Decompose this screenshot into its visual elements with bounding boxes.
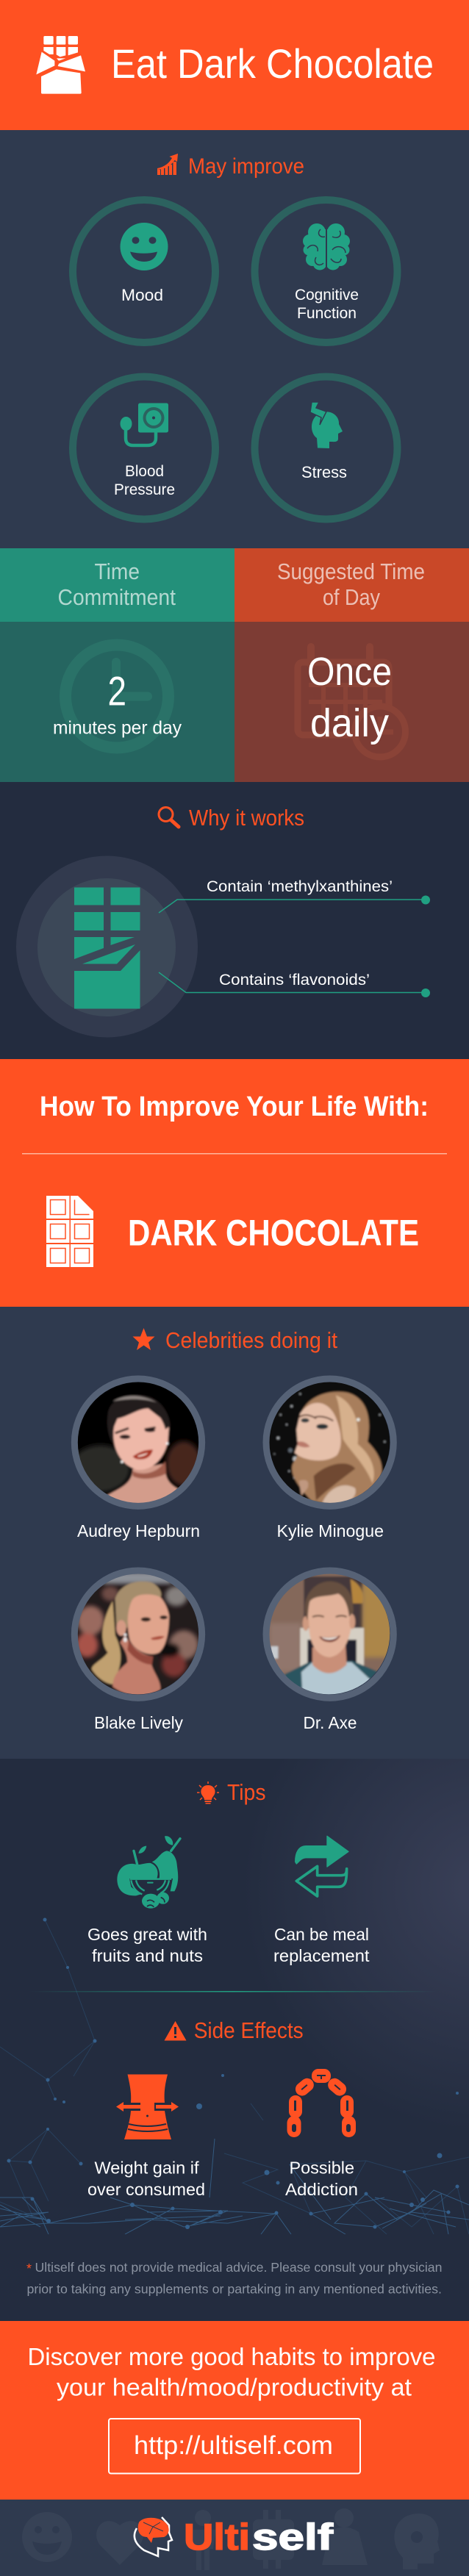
- panel: may improve: [0, 130, 469, 548]
- label: blood pressure: Pressure: [114, 481, 175, 498]
- network band: [0, 2139, 469, 2234]
- heading: suggested time of day: Suggested Time: [277, 559, 425, 584]
- logo mark: head and brain: [135, 2517, 172, 2556]
- label: cognitive function: Cognitive: [295, 287, 359, 304]
- logo wordmark: Ulti: [184, 2516, 250, 2558]
- panel: how to improve: [0, 1059, 469, 1307]
- label: weight gain: [87, 2158, 205, 2199]
- panel: celebrities: [71, 1328, 397, 1732]
- text: discover more: Discover more good habits to improve: [28, 2343, 435, 2370]
- panel: header: [0, 0, 469, 130]
- title: Eat Dark Chocolate: [111, 40, 434, 87]
- side effect: addiction: [285, 2069, 358, 2199]
- label: blood pressure: [114, 463, 175, 498]
- logo: ultiself: [135, 2516, 333, 2558]
- icon: blood pressure monitor: [121, 403, 168, 445]
- callout: flavonoids: [159, 972, 430, 997]
- icon: magnifier: [159, 807, 179, 827]
- heading: celebrities: Celebrities doing it: [165, 1327, 337, 1353]
- text: discover more: [28, 2343, 435, 2400]
- link button: http://ultiself.com: [134, 2431, 333, 2460]
- item: cognitive function: [254, 200, 397, 342]
- label: cognitive function: [295, 287, 359, 322]
- value: once daily: Once: [307, 650, 392, 694]
- icon: light bulb: [197, 1782, 219, 1804]
- disclaimer: [26, 2260, 443, 2296]
- panel: time commitment: [0, 548, 234, 782]
- icon: brain: [303, 223, 350, 270]
- disclaimer: prior to taking any supplements or partaking in any mentioned activities.: [26, 2281, 442, 2296]
- label: weight gain: over consumed: [87, 2180, 205, 2199]
- name: blake lively: Blake Lively: [94, 1713, 183, 1732]
- heading: time commitment: [57, 559, 176, 610]
- panel: tips and side effects: [0, 1759, 469, 2321]
- icon: smiley: [121, 223, 168, 270]
- value: once daily: daily: [310, 701, 389, 745]
- label: mood: Mood: [121, 286, 163, 304]
- icon: widening waist: [116, 2074, 179, 2139]
- link button: [109, 2419, 360, 2474]
- icon: ghost clock: [65, 645, 168, 748]
- icon: swap arrows: [296, 1836, 348, 1896]
- icon: ghost calendar and clock: [298, 647, 406, 757]
- label: can be meal replacement: replacement: [273, 1946, 370, 1965]
- diagram: chocolate bar with callouts: [16, 855, 430, 1038]
- label: cognitive function: Function: [297, 305, 357, 322]
- label: goes great with fruits and nuts: Goes great with: [87, 1925, 207, 1944]
- label: goes great with fruits and nuts: [87, 1925, 207, 1965]
- heading: why it works: Why it works: [189, 805, 304, 830]
- heading: dark chocolate: DARK CHOCOLATE: [128, 1213, 419, 1254]
- icon: unwrapped chocolate bar: [36, 36, 85, 94]
- label: goes great with fruits and nuts: fruits and nuts: [92, 1946, 203, 1965]
- photo: kylie minogue: [263, 1376, 397, 1510]
- value: 2: 2: [107, 667, 126, 714]
- callout: flavonoids: Contains ‘flavonoids’: [219, 972, 370, 989]
- tip: fruits and nuts: [87, 1836, 207, 1965]
- item: stress: [254, 376, 397, 519]
- panel: why it works: [0, 782, 469, 1059]
- icon: chocolate bar: [46, 1196, 93, 1267]
- side effect: weight gain: [87, 2074, 205, 2199]
- heading: time commitment: Commitment: [57, 584, 176, 610]
- label: minutes per day: minutes per day: [53, 717, 182, 738]
- disclaimer: Ultiself does not provide medical advice. Please consult your physician: [35, 2260, 443, 2275]
- icon: chocolate bar: [74, 888, 140, 1008]
- name: kylie minogue: Kylie Minogue: [276, 1521, 384, 1540]
- icon: chain: [287, 2069, 356, 2137]
- panel: footer: [0, 2500, 469, 2576]
- item: blood pressure: [73, 376, 215, 519]
- callout: methylxanthines: [159, 878, 430, 913]
- icon: rising chart: [157, 154, 178, 175]
- heading: how to improve: How To Improve Your Life With:: [40, 1091, 429, 1122]
- disclaimer: *: [26, 2261, 32, 2276]
- photo: blake lively: [71, 1567, 206, 1701]
- callout: methylxanthines: Contain ‘methylxanthines’: [207, 878, 393, 895]
- name: audrey hepburn: Audrey Hepburn: [77, 1521, 200, 1540]
- heading: may improve: May improve: [188, 154, 304, 179]
- label: can be meal replacement: Can be meal: [274, 1925, 369, 1944]
- heading: time commitment: Time: [94, 559, 140, 584]
- photo: dr. axe: [263, 1567, 397, 1701]
- icon: warning triangle: [165, 2021, 187, 2040]
- logo wordmark: self: [252, 2516, 333, 2558]
- label: can be meal replacement: [273, 1925, 370, 1965]
- panel: call to action: [0, 2321, 469, 2500]
- item: mood: [73, 200, 215, 342]
- label: weight gain: Weight gain if: [94, 2158, 199, 2177]
- logo wordmark: [184, 2516, 333, 2558]
- network background: [0, 1920, 469, 2234]
- value: once daily: [307, 650, 392, 745]
- label: addiction: [285, 2158, 358, 2199]
- tip: meal replacement: [273, 1836, 370, 1965]
- text: discover more: your health/mood/productivity at: [57, 2374, 412, 2400]
- photo: audrey hepburn: [71, 1376, 206, 1510]
- heading: suggested time of day: [277, 559, 425, 610]
- heading: suggested time of day: of Day: [323, 584, 380, 610]
- heading: side effects: Side Effects: [194, 2017, 304, 2043]
- panel: suggested time of day: [234, 548, 469, 782]
- label: addiction: Possible: [290, 2158, 354, 2177]
- label: stress: Stress: [301, 463, 347, 481]
- heading: tips: Tips: [227, 1779, 266, 1805]
- icon: star: [132, 1328, 154, 1350]
- icon: stressed head: [310, 402, 343, 448]
- label: blood pressure: Blood: [125, 463, 164, 480]
- name: dr. axe: Dr. Axe: [303, 1713, 357, 1732]
- label: addiction: Addiction: [285, 2180, 358, 2199]
- icon: fruits: [117, 1836, 180, 1909]
- ghost icons: [22, 2508, 440, 2570]
